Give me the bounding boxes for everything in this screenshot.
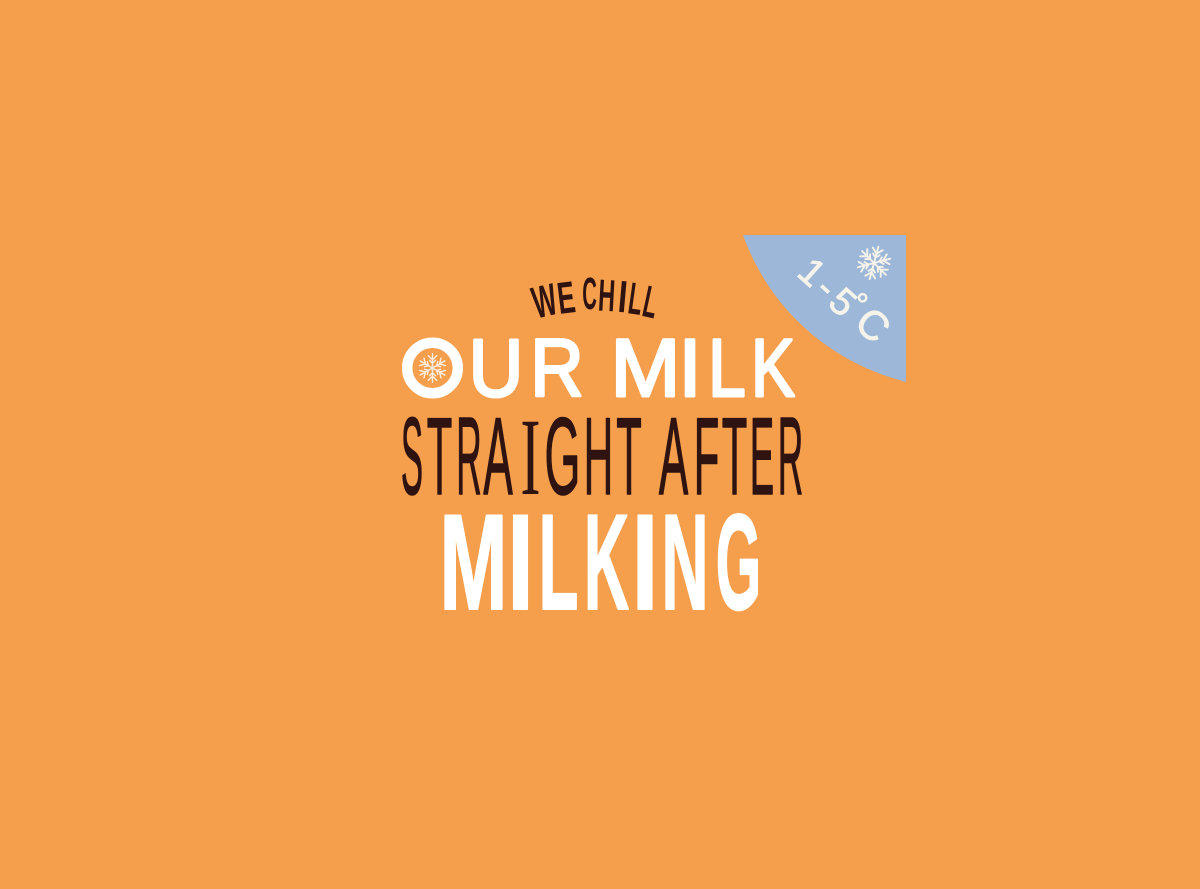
- heading line: MILKING: G: [716, 487, 761, 639]
- heading line: WE CHILL: I: [616, 273, 629, 323]
- heading line: STRAIGHT AFTER: R: [778, 396, 803, 518]
- heading line: STRAIGHT AFTER: T: [427, 395, 452, 518]
- heading line: STRAIGHT AFTER: T: [616, 395, 642, 518]
- heading line: WE CHILL: [527, 269, 663, 328]
- icon: snowflake in O: [418, 354, 447, 382]
- heading line: MILKING: M: [440, 485, 507, 638]
- letter O ring with snowflake: O: [404, 326, 461, 413]
- temperature label: 1: [789, 250, 833, 295]
- letters UR MILK: U: [469, 322, 523, 414]
- heading line: MILKING: L: [539, 485, 578, 638]
- letters UR MILK: I: [679, 323, 701, 414]
- heading line: WE CHILL: E: [554, 272, 578, 324]
- heading line: STRAIGHT AFTER: R: [456, 396, 482, 518]
- heading line: WE CHILL: L: [625, 273, 646, 325]
- heading line: OUR MILK: [404, 321, 795, 414]
- heading line: WE CHILL: H: [597, 270, 617, 321]
- heading line: WE CHILL: L: [639, 276, 663, 328]
- heading line: MILKING: I: [632, 486, 658, 638]
- heading line: WE CHILL: C: [582, 269, 597, 319]
- corner badge: 1-5°C: [743, 235, 906, 382]
- temperature label: 5: [820, 280, 864, 325]
- letters UR MILK: [469, 321, 795, 414]
- heading line: STRAIGHT AFTER: [401, 394, 803, 519]
- heading line: STRAIGHT AFTER: A: [483, 394, 513, 518]
- heading line: STRAIGHT AFTER: E: [750, 396, 774, 518]
- icon: snowflake: [853, 242, 895, 284]
- temperature label: [789, 250, 899, 352]
- heading line: MILKING: N: [661, 485, 709, 638]
- heading line: MILKING: K: [584, 487, 629, 639]
- heading line: MILKING: I: [507, 486, 534, 638]
- heading line: STRAIGHT AFTER: F: [694, 395, 719, 518]
- heading line: STRAIGHT AFTER: G: [545, 395, 580, 517]
- heading line: STRAIGHT AFTER: T: [722, 395, 747, 518]
- letters UR MILK: K: [751, 322, 795, 414]
- heading line: STRAIGHT AFTER: I: [520, 397, 541, 519]
- heading line: STRAIGHT AFTER: H: [584, 395, 613, 518]
- heading line: WE CHILL: W: [527, 274, 562, 328]
- heading line: STRAIGHT AFTER: A: [659, 394, 688, 518]
- letters UR MILK: L: [708, 322, 746, 413]
- temperature label: -: [808, 268, 845, 308]
- temperature label: °: [841, 285, 875, 321]
- letters UR MILK: M: [611, 322, 680, 414]
- letters UR MILK: R: [530, 321, 584, 414]
- heading line: MILKING: [440, 485, 761, 639]
- heading line: STRAIGHT AFTER: S: [401, 395, 423, 518]
- badge shape: [743, 235, 906, 382]
- temperature label: C: [847, 298, 899, 352]
